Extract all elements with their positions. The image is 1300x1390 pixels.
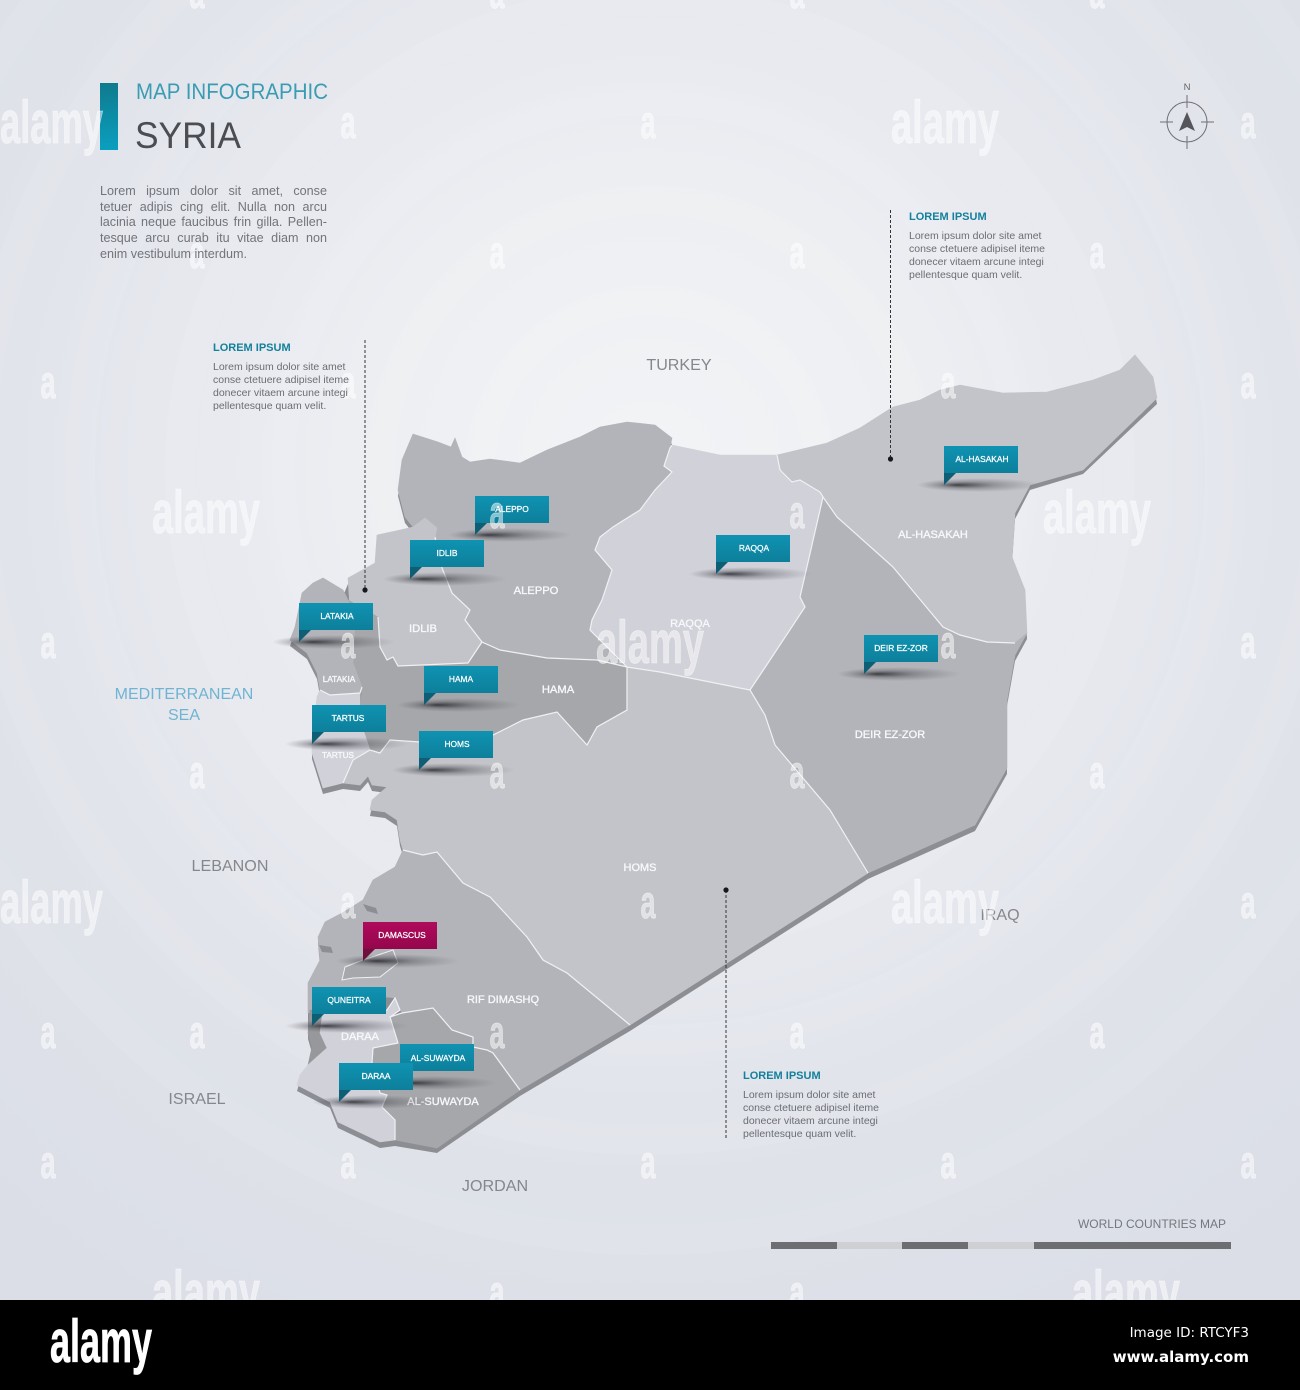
scale bar [771,1242,1231,1249]
callout: top right: conse ctetuere adipisel iteme [909,243,1045,255]
title: SYRIA [135,115,241,156]
map region labels [322,529,968,1108]
map region labels: RAQQA [670,618,711,630]
region: Latakia [290,578,362,695]
callout: left: conse ctetuere adipisel iteme [213,374,349,386]
pin: Deir ez-Zor [837,635,961,681]
pin: Quneitra [285,987,409,1033]
pin: Daraa: DARAA [362,1071,391,1081]
country labels: JORDAN [462,1177,528,1195]
watermarks: a [940,356,956,408]
watermarks: a [190,1006,205,1058]
pin: Aleppo: ALEPPO [495,504,529,514]
callout leader: left [362,340,368,593]
watermarks: a [1240,356,1256,408]
region: Idlib [348,518,482,666]
watermarks: alamy [0,89,103,156]
watermarks: a [1090,746,1105,798]
subtitle: MAP INFOGRAPHIC [136,79,328,104]
pin: Latakia [272,603,396,649]
pin: Latakia: LATAKIA [320,611,354,621]
country labels: IRAQ [980,906,1020,924]
map region labels: AL-HASAKAH [898,529,968,541]
callout: left: donecer vitaem arcune integi [213,387,348,399]
watermarks: a [40,1006,56,1058]
intro text block [100,184,327,261]
intro text block: Lorem ipsum dolor sit amet, conse [100,184,327,198]
callout leader: right [888,210,893,462]
watermarks: a [40,1136,56,1188]
coast shadow accents [319,904,378,953]
pin: Quneitra: QUNEITRA [327,995,371,1005]
watermarks: a [340,1136,356,1188]
pin: Al-Hasakah [917,446,1041,492]
region: Rif Dimashq [308,850,630,1090]
pin: Homs [392,731,516,777]
region: Hama [348,600,627,753]
watermarks: a [940,616,956,668]
watermarks: a [1090,1006,1105,1058]
sea label: SEA [168,707,200,724]
watermarks: a [340,356,356,408]
callout: left: pellentesque quam velit. [213,400,326,412]
watermarks: a [790,746,805,798]
callout: top right: Lorem ipsum dolor site amet [909,230,1041,242]
watermarks: a [1240,616,1256,668]
pin: Damascus: DAMASCUS [378,930,426,940]
watermarks: alamy [1072,1259,1180,1326]
pin: Idlib: IDLIB [437,548,458,558]
watermarks: a [640,96,656,148]
callout: left: Lorem ipsum dolor site amet [213,361,345,373]
watermarks: a [640,876,656,928]
map region labels: HOMS [624,862,656,874]
watermarks: alamy [1043,479,1151,546]
intro text block: tetuer adipis cing elit. Nulla non arcu [100,200,327,214]
watermarks: a [1240,1136,1256,1188]
callout: top right: LOREM IPSUM [909,211,987,223]
country labels [168,356,1020,1195]
callout: top right: pellentesque quam velit. [909,269,1022,281]
callout: left [213,342,349,412]
callout: left: LOREM IPSUM [213,342,291,354]
region: Homs [343,667,868,1025]
pin: Damascus [336,922,460,968]
pin: Hama: HAMA [449,674,474,684]
watermarks: alamy [891,869,999,936]
watermarks: a [940,1136,956,1188]
callout: bottom [743,1070,879,1140]
map region labels: DARAA [341,1031,380,1043]
watermarks: a [1090,226,1105,278]
callout: top right [909,211,1045,281]
watermarks: a [340,96,356,148]
region: Damascus [342,950,398,980]
region: Quneitra [308,1010,327,1065]
pin: Raqqa [689,535,813,581]
region borders [320,445,1015,1140]
watermarks: a [790,1006,805,1058]
watermarks: a [40,616,56,668]
pin: Aleppo [448,496,572,542]
watermarks: a [790,486,805,538]
footer logo: alamy [50,1308,152,1375]
pin: Hama [397,666,521,712]
watermarks: a [490,226,505,278]
map region labels: TARTUS [322,751,355,760]
country labels: ISRAEL [168,1090,226,1108]
watermarks: a [40,356,56,408]
country labels: LEBANON [192,857,268,875]
watermarks: a [790,226,805,278]
region: Al-Hasakah [777,355,1157,643]
country labels: TURKEY [646,356,712,374]
pin: Homs: HOMS [444,739,470,749]
pin: Al-Hasakah: AL-HASAKAH [955,454,1009,464]
pin: Daraa [312,1063,436,1109]
compass: N [1184,82,1191,93]
watermarks: a [190,746,205,798]
watermarks: a [640,1136,656,1188]
watermarks: a [340,876,356,928]
map region labels: IDLIB [409,623,437,635]
watermarks: a [490,746,505,798]
watermarks: a [790,1266,805,1318]
pin: Raqqa: RAQQA [739,543,770,553]
footer bar [0,1300,1300,1390]
pin: Deir ez-Zor: DEIR EZ-ZOR [874,643,928,653]
pin: Tartus: TARTUS [332,713,365,723]
watermarks: a [490,486,505,538]
region: Al-Suwayda [372,1008,520,1148]
map extrusion [290,361,1157,1153]
region: Tartus [312,690,370,788]
map region labels: LATAKIA [323,675,356,684]
callout: bottom: Lorem ipsum dolor site amet [743,1089,875,1101]
callout: top right: donecer vitaem arcune integi [909,256,1044,268]
pin: Al-Suwayda: AL-SUWAYDA [411,1053,466,1063]
watermarks: a [490,1006,505,1058]
footer url: www.alamy.com [1113,1348,1249,1366]
pin: Idlib [383,540,507,586]
intro text block: tesque arcu curab itu vitae diam non [100,231,327,245]
sea label: MEDITERRANEAN [115,686,253,703]
region: Daraa [297,998,400,1142]
watermarks: a [340,616,356,668]
watermarks: alamy [891,89,999,156]
watermarks: alamy [596,609,704,676]
map region labels: RIF DIMASHQ [467,994,539,1006]
watermarks: a [190,226,205,278]
region: Raqqa [590,445,823,690]
intro text block: enim vestibulum interdum. [100,247,247,261]
map region labels: DEIR EZ-ZOR [855,729,925,741]
callout: bottom: pellentesque quam velit. [743,1128,856,1140]
watermarks: alamy [152,1259,260,1326]
compass [1160,82,1214,149]
callout leader: bottom [723,887,729,1140]
panel: Syria map [290,355,1157,1153]
pin: Al-Suwayda [373,1044,497,1090]
watermarks: alamy [0,869,103,936]
region: Deir ez-Zor [750,497,1027,873]
watermarks: a [1240,96,1256,148]
map region labels: ALEPPO [514,585,559,597]
pin: Tartus [285,705,409,751]
callout: bottom: LOREM IPSUM [743,1070,821,1082]
watermarks: a [490,1266,505,1318]
callout: bottom: conse ctetuere adipisel iteme [743,1102,879,1114]
intro text block: lacinia neque faucibus frin gilla. Pellen- [100,215,327,229]
scale caption: WORLD COUNTRIES MAP [1078,1217,1226,1231]
footer image id: Image ID: RTCYF3 [1130,1325,1249,1341]
callout: bottom: donecer vitaem arcune integi [743,1115,878,1127]
watermarks: alamy [152,479,260,546]
watermarks: a [1240,876,1256,928]
sea label [115,686,253,724]
region: Aleppo [398,422,672,667]
map region labels: HAMA [542,684,575,696]
title accent bar [100,83,118,150]
map region labels: AL-SUWAYDA [407,1096,479,1108]
